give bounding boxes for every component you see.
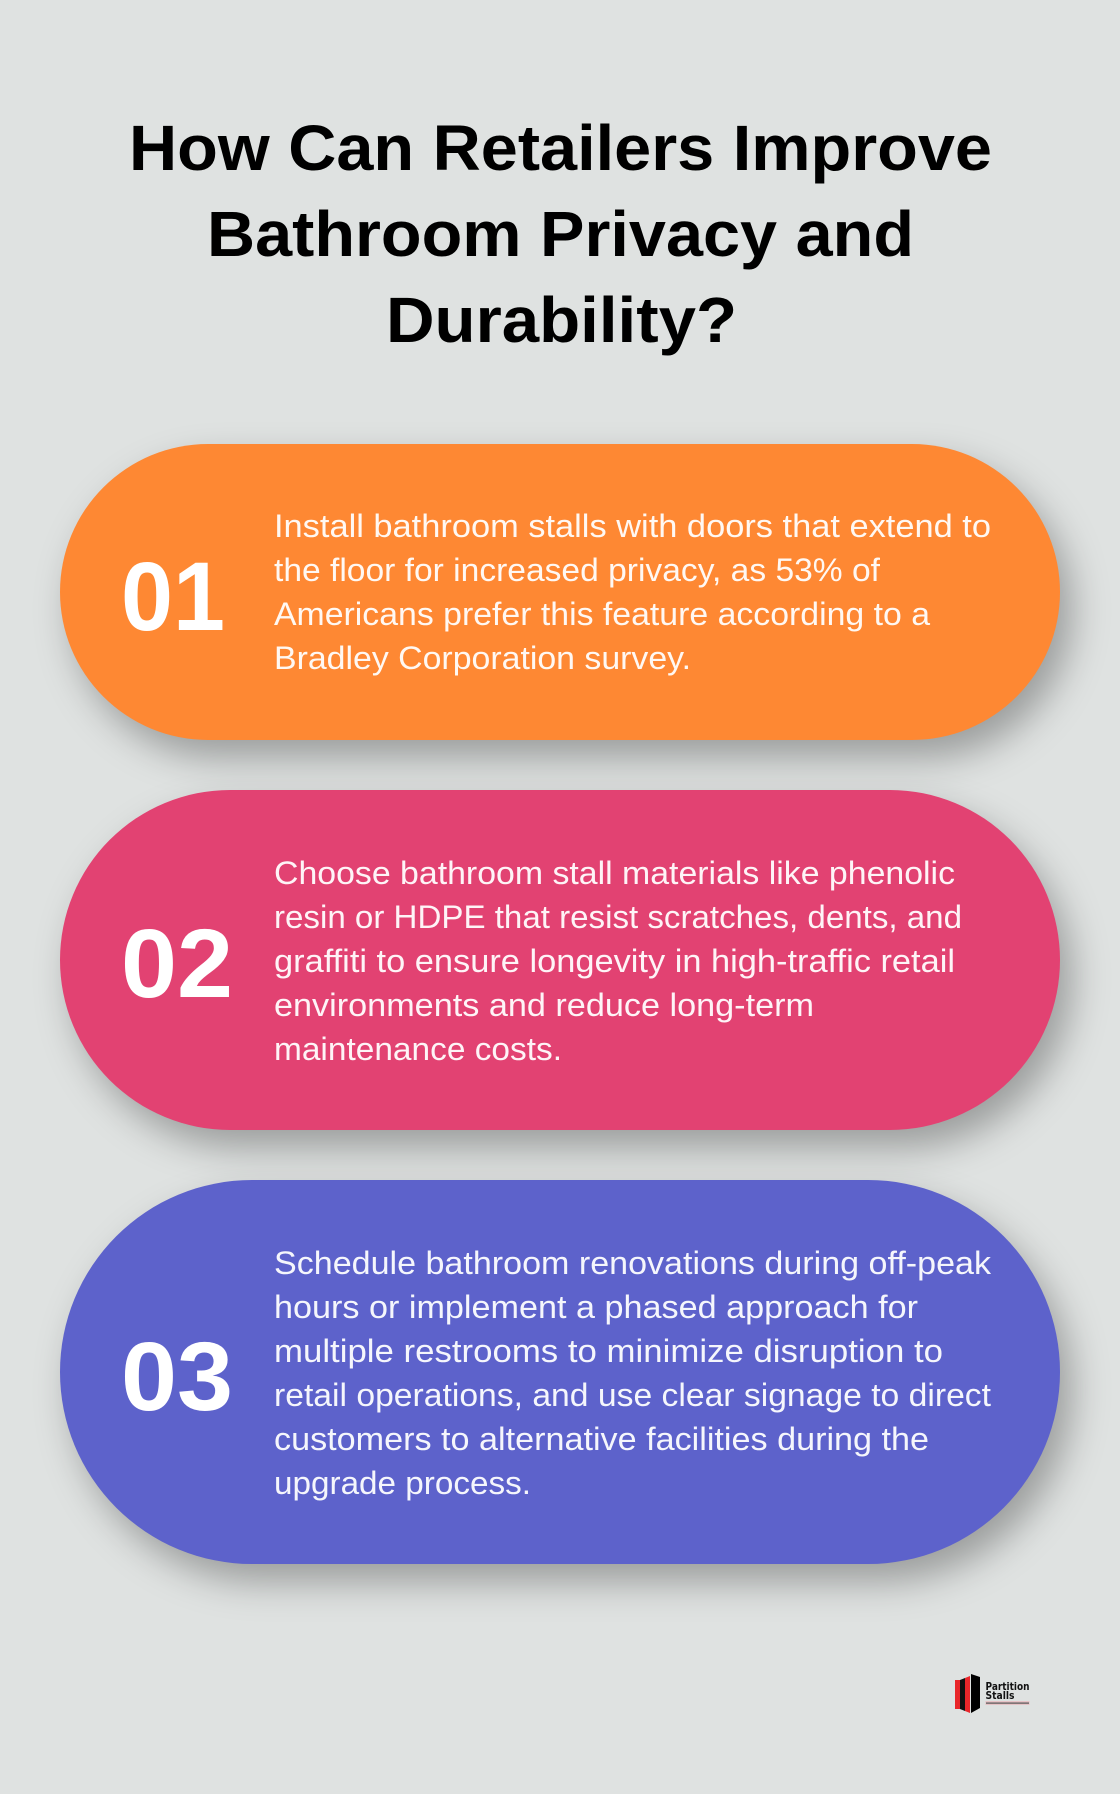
- text: step 03 body: Schedule bathroom renovations during off-peak: [274, 1245, 992, 1281]
- logo: Partition Stalls: [955, 1674, 1030, 1713]
- text: step 02 body: [274, 855, 962, 1067]
- title: How Can Retailers Improve: [129, 112, 992, 184]
- title: Bathroom Privacy and: [207, 198, 914, 270]
- text: step 03 body: [274, 1245, 992, 1501]
- title: Durability?: [386, 284, 737, 356]
- panel: step 03: [60, 1180, 1060, 1564]
- text: step 03 body: hours or implement a phased approach for: [274, 1289, 918, 1325]
- text: step 03 body: upgrade process.: [274, 1465, 531, 1501]
- number 01: 01: [121, 542, 225, 651]
- panel: step 01: [60, 444, 1060, 740]
- text: step 01 body: [274, 508, 991, 676]
- text: step 02 body: resin or HDPE that resist scratches, dents, and: [274, 899, 962, 935]
- text: step 01 body: the floor for increased privacy, as 53% of: [274, 552, 881, 588]
- number 02: 02: [121, 909, 233, 1018]
- wordmark: Partition: [986, 1681, 1030, 1693]
- title: [129, 112, 992, 356]
- text: step 02 body: graffiti to ensure longevity in high-traffic retail: [274, 943, 955, 979]
- text: step 02 body: environments and reduce long-term: [274, 987, 814, 1023]
- icon: partition bars: [955, 1674, 980, 1713]
- number 03: 03: [121, 1322, 233, 1431]
- text: step 03 body: multiple restrooms to minimize disruption to: [274, 1333, 943, 1369]
- wordmark: Stalls: [986, 1690, 1014, 1702]
- text: step 01 body: Bradley Corporation survey.: [274, 640, 691, 676]
- text: step 01 body: Install bathroom stalls with doors that extend to: [274, 508, 991, 544]
- text: step 03 body: retail operations, and use clear signage to direct: [274, 1377, 991, 1413]
- text: step 02 body: Choose bathroom stall materials like phenolic: [274, 855, 955, 891]
- wordmark: [986, 1681, 1030, 1705]
- text: step 03 body: customers to alternative facilities during the: [274, 1421, 929, 1457]
- panel: step 02: [60, 790, 1060, 1130]
- text: step 02 body: maintenance costs.: [274, 1031, 562, 1067]
- text: step 01 body: Americans prefer this feature according to a: [274, 596, 931, 632]
